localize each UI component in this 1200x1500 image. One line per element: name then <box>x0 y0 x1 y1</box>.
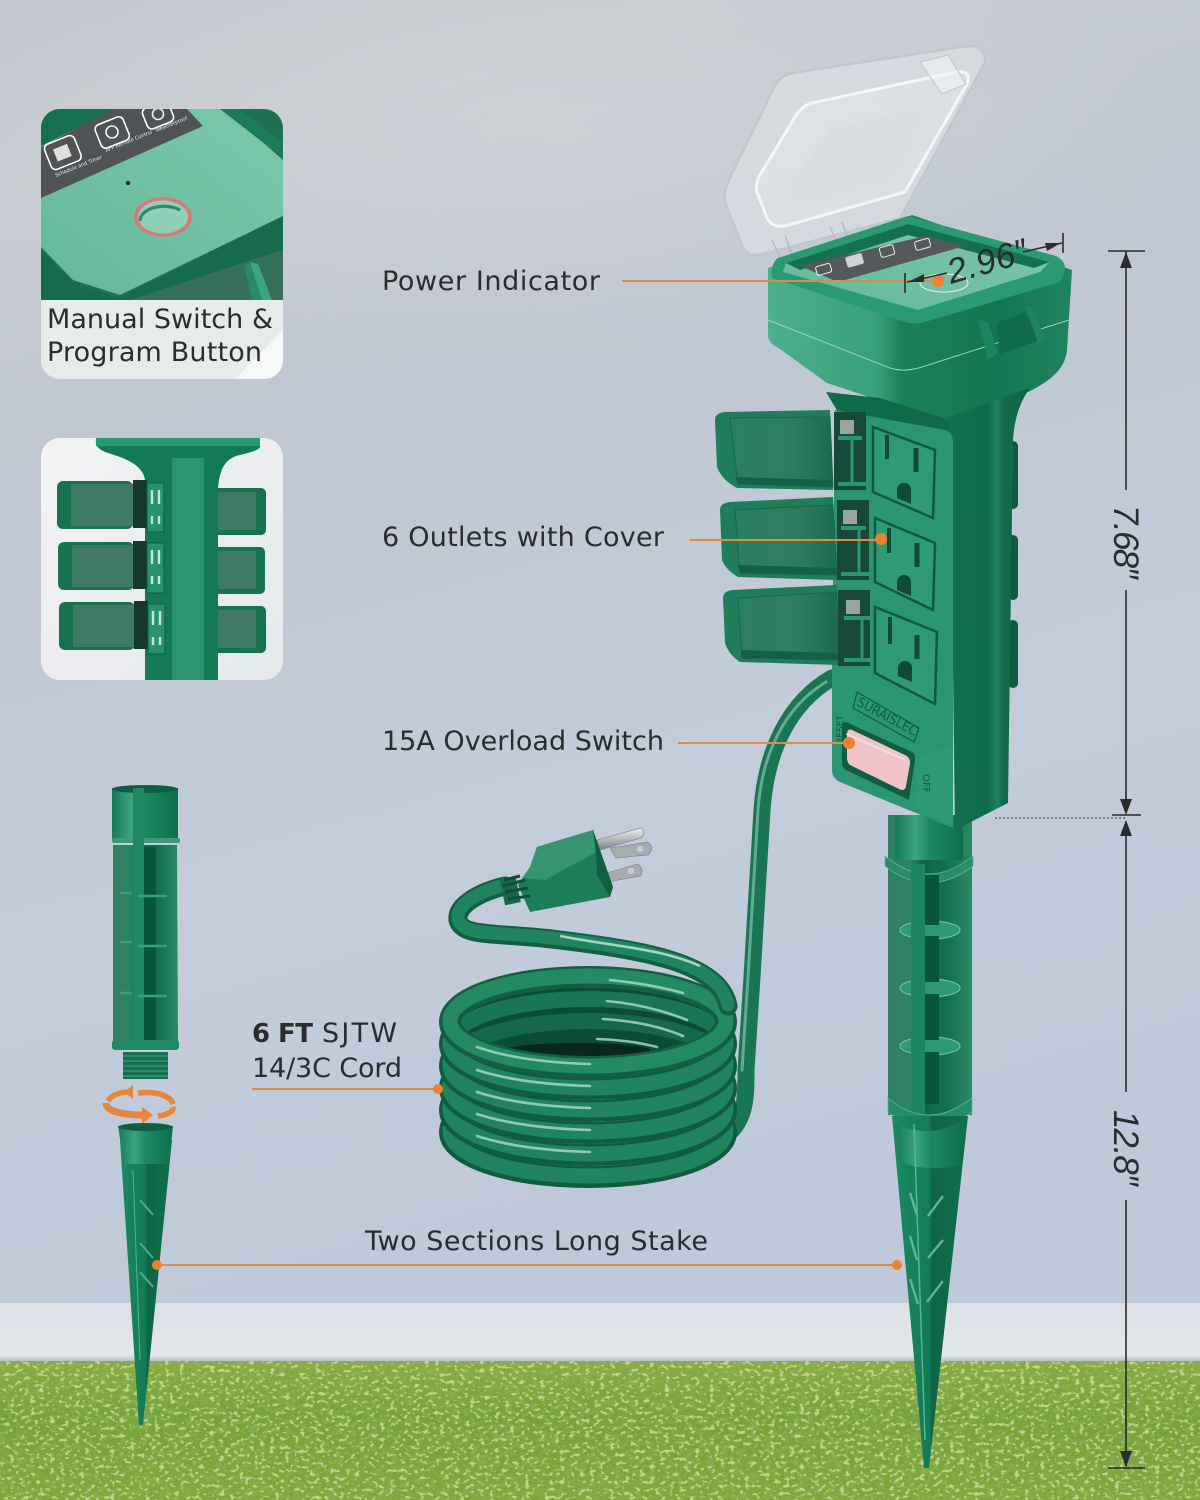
sticker with icons: APP Remote Control <box>105 130 153 154</box>
cable coil <box>450 885 730 1177</box>
stake on main unit <box>885 815 973 1468</box>
power plug <box>500 828 652 912</box>
side view body <box>96 438 260 680</box>
stalk front face <box>832 410 953 828</box>
outlet 1 <box>873 427 935 518</box>
overload switch <box>836 692 931 800</box>
stake collars and discs <box>885 856 973 1127</box>
callout: power indicator: Power Indicator <box>382 266 601 297</box>
stake barbs <box>910 1193 943 1304</box>
removable stake: lower section <box>118 1123 173 1425</box>
transparent lid <box>725 46 985 258</box>
coil top ring <box>450 977 726 1067</box>
button photo surface <box>41 109 283 300</box>
stalk side face <box>945 388 1030 830</box>
unit head <box>768 215 1072 445</box>
dimension: stake length: 12.8″ <box>1106 1110 1145 1188</box>
inset caption <box>41 300 283 379</box>
dimension: stake length <box>995 818 1145 1468</box>
outlets with flaps <box>715 410 937 704</box>
callout: cord: 6 FT <box>252 1019 313 1049</box>
callout: long stake: Two Sections Long Stake <box>364 1226 708 1257</box>
flap 2 <box>720 497 837 580</box>
program button <box>126 181 192 237</box>
stake spike <box>892 1116 968 1468</box>
side view outlets <box>133 480 165 654</box>
upper section thread <box>123 1052 168 1079</box>
coil hole <box>461 988 715 1056</box>
callout: cord <box>252 1018 443 1094</box>
overload switch: OFF <box>920 774 931 794</box>
overload switch: SURAISLEC <box>854 695 919 740</box>
panel: side view inset <box>41 438 283 680</box>
overload switch: RESET <box>836 715 846 744</box>
flap 3 <box>723 585 838 665</box>
callout: outlets: 6 Outlets with Cover <box>382 522 665 553</box>
callout: outlets <box>382 522 887 553</box>
coil upper loop <box>458 886 728 1006</box>
callout: cord: 14/3C Cord <box>252 1053 402 1084</box>
callout: cord: SJTW <box>322 1018 397 1049</box>
hinges <box>834 412 870 666</box>
dimension: width <box>905 231 1063 293</box>
right side nubs <box>1008 441 1018 688</box>
side view right flaps <box>218 488 266 653</box>
coil highlights <box>477 980 687 1152</box>
sticker with icons: Schedule and Timer <box>55 154 104 179</box>
grass <box>0 1361 1200 1500</box>
head body <box>768 215 1072 418</box>
dimension: height of unit: 7.68″ <box>1106 505 1145 581</box>
removable stake: upper section <box>112 785 180 1079</box>
sticker with icons <box>41 100 203 198</box>
side view left flaps <box>57 481 135 650</box>
outlet 2 <box>875 518 935 610</box>
callout: overload switch: 15A Overload Switch <box>382 726 664 757</box>
plug prongs <box>597 828 652 882</box>
main cord to unit <box>732 678 832 1130</box>
inset caption: Manual Switch & <box>47 304 273 335</box>
head neck <box>826 392 955 445</box>
coil lower rings <box>450 998 726 1177</box>
baseboard <box>0 1303 1200 1361</box>
callout: power indicator <box>382 266 944 297</box>
unit stalk <box>832 388 1030 830</box>
head rim <box>772 216 1065 324</box>
head sticker <box>800 236 965 282</box>
callout: long stake <box>152 1226 902 1270</box>
rotate arrows icon <box>106 1085 173 1124</box>
upper section fins <box>120 893 167 996</box>
outlet 3 <box>875 607 937 704</box>
dimension: width: 2.96″ <box>941 231 1034 292</box>
dimension: height of unit <box>1106 251 1145 815</box>
callout: overload switch <box>382 726 855 757</box>
panel: manual switch inset <box>41 100 283 379</box>
head clips <box>978 305 1046 360</box>
sticker with icons: Weatherproof <box>155 115 189 134</box>
plug body <box>518 830 613 912</box>
inset caption: Program Button <box>47 337 262 368</box>
flap 1 <box>715 410 833 490</box>
